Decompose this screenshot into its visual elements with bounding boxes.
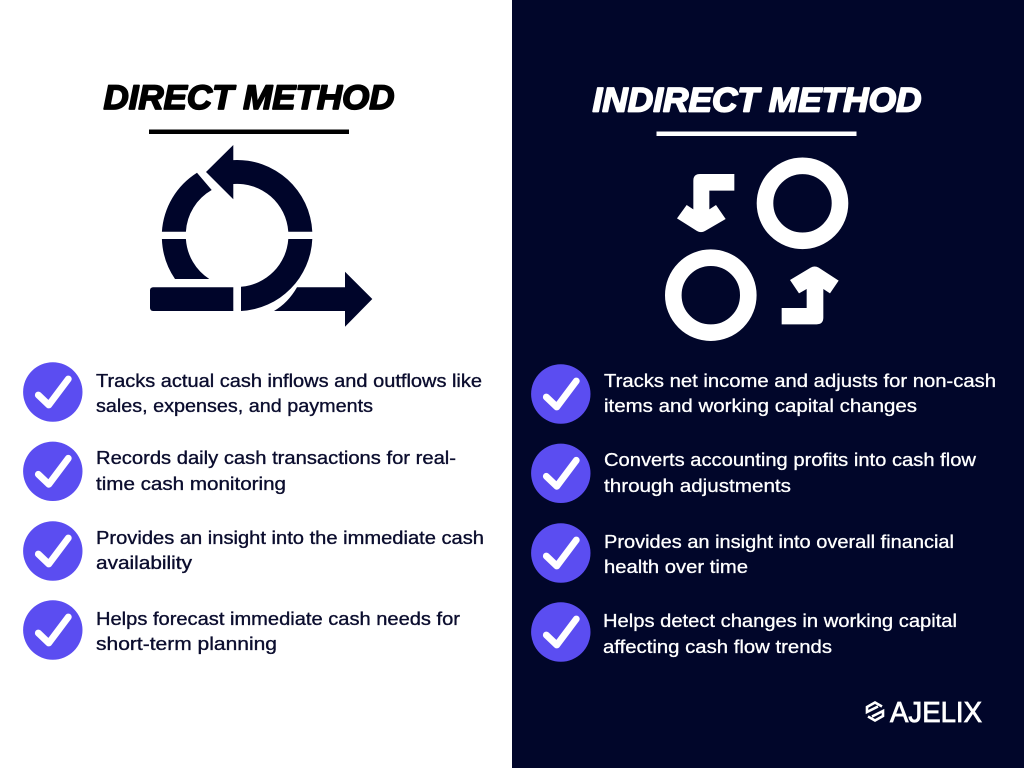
item: tracks net income: Tracks net income and adjusts for non-cash <box>604 370 996 391</box>
item: financial health: Provides an insight into overall financial <box>604 531 954 552</box>
panel: direct method background <box>0 0 512 768</box>
logo: Ajelix: AJELIX <box>890 697 982 729</box>
item: records daily transactions: time cash monitoring <box>96 473 286 494</box>
heading: indirect method <box>592 82 922 136</box>
item: tracks actual cash: Tracks actual cash inflows and outflows like <box>96 370 482 391</box>
item: forecast cash needs: Helps forecast immediate cash needs for <box>96 608 460 629</box>
panel: indirect method background <box>512 0 1024 768</box>
item: converts profits: Converts accounting profits into cash flow <box>604 449 977 470</box>
icon: exchange circles and arrows <box>673 166 840 333</box>
item: tracks actual cash: sales, expenses, and payments <box>96 395 373 416</box>
item: working capital changes <box>531 602 957 662</box>
list: indirect method points <box>531 364 996 662</box>
item: immediate cash availability <box>23 521 484 581</box>
item: tracks net income: items and working capital changes <box>604 395 917 416</box>
item: immediate cash availability: availability <box>96 552 193 573</box>
item: converts profits <box>531 444 977 503</box>
item: records daily transactions <box>23 442 456 501</box>
item: records daily transactions: Records daily cash transactions for real- <box>96 447 456 468</box>
item: financial health: health over time <box>604 556 748 577</box>
item: forecast cash needs <box>23 600 460 660</box>
heading: indirect method: INDIRECT METHOD <box>592 82 922 120</box>
item: forecast cash needs: short-term planning <box>96 633 277 654</box>
item: immediate cash availability: Provides an insight into the immediate cash <box>96 527 484 548</box>
heading: direct method: DIRECT METHOD <box>104 79 394 117</box>
icon: iterative loop arrow <box>150 145 372 327</box>
item: tracks net income <box>531 364 996 424</box>
item: working capital changes: Helps detect changes in working capital <box>603 610 957 631</box>
list: direct method points <box>23 362 484 660</box>
item: tracks actual cash <box>23 362 482 422</box>
item: converts profits: through adjustments <box>604 475 791 496</box>
item: working capital changes: affecting cash flow trends <box>603 636 832 657</box>
heading: direct method <box>104 79 394 134</box>
item: financial health <box>531 523 954 583</box>
